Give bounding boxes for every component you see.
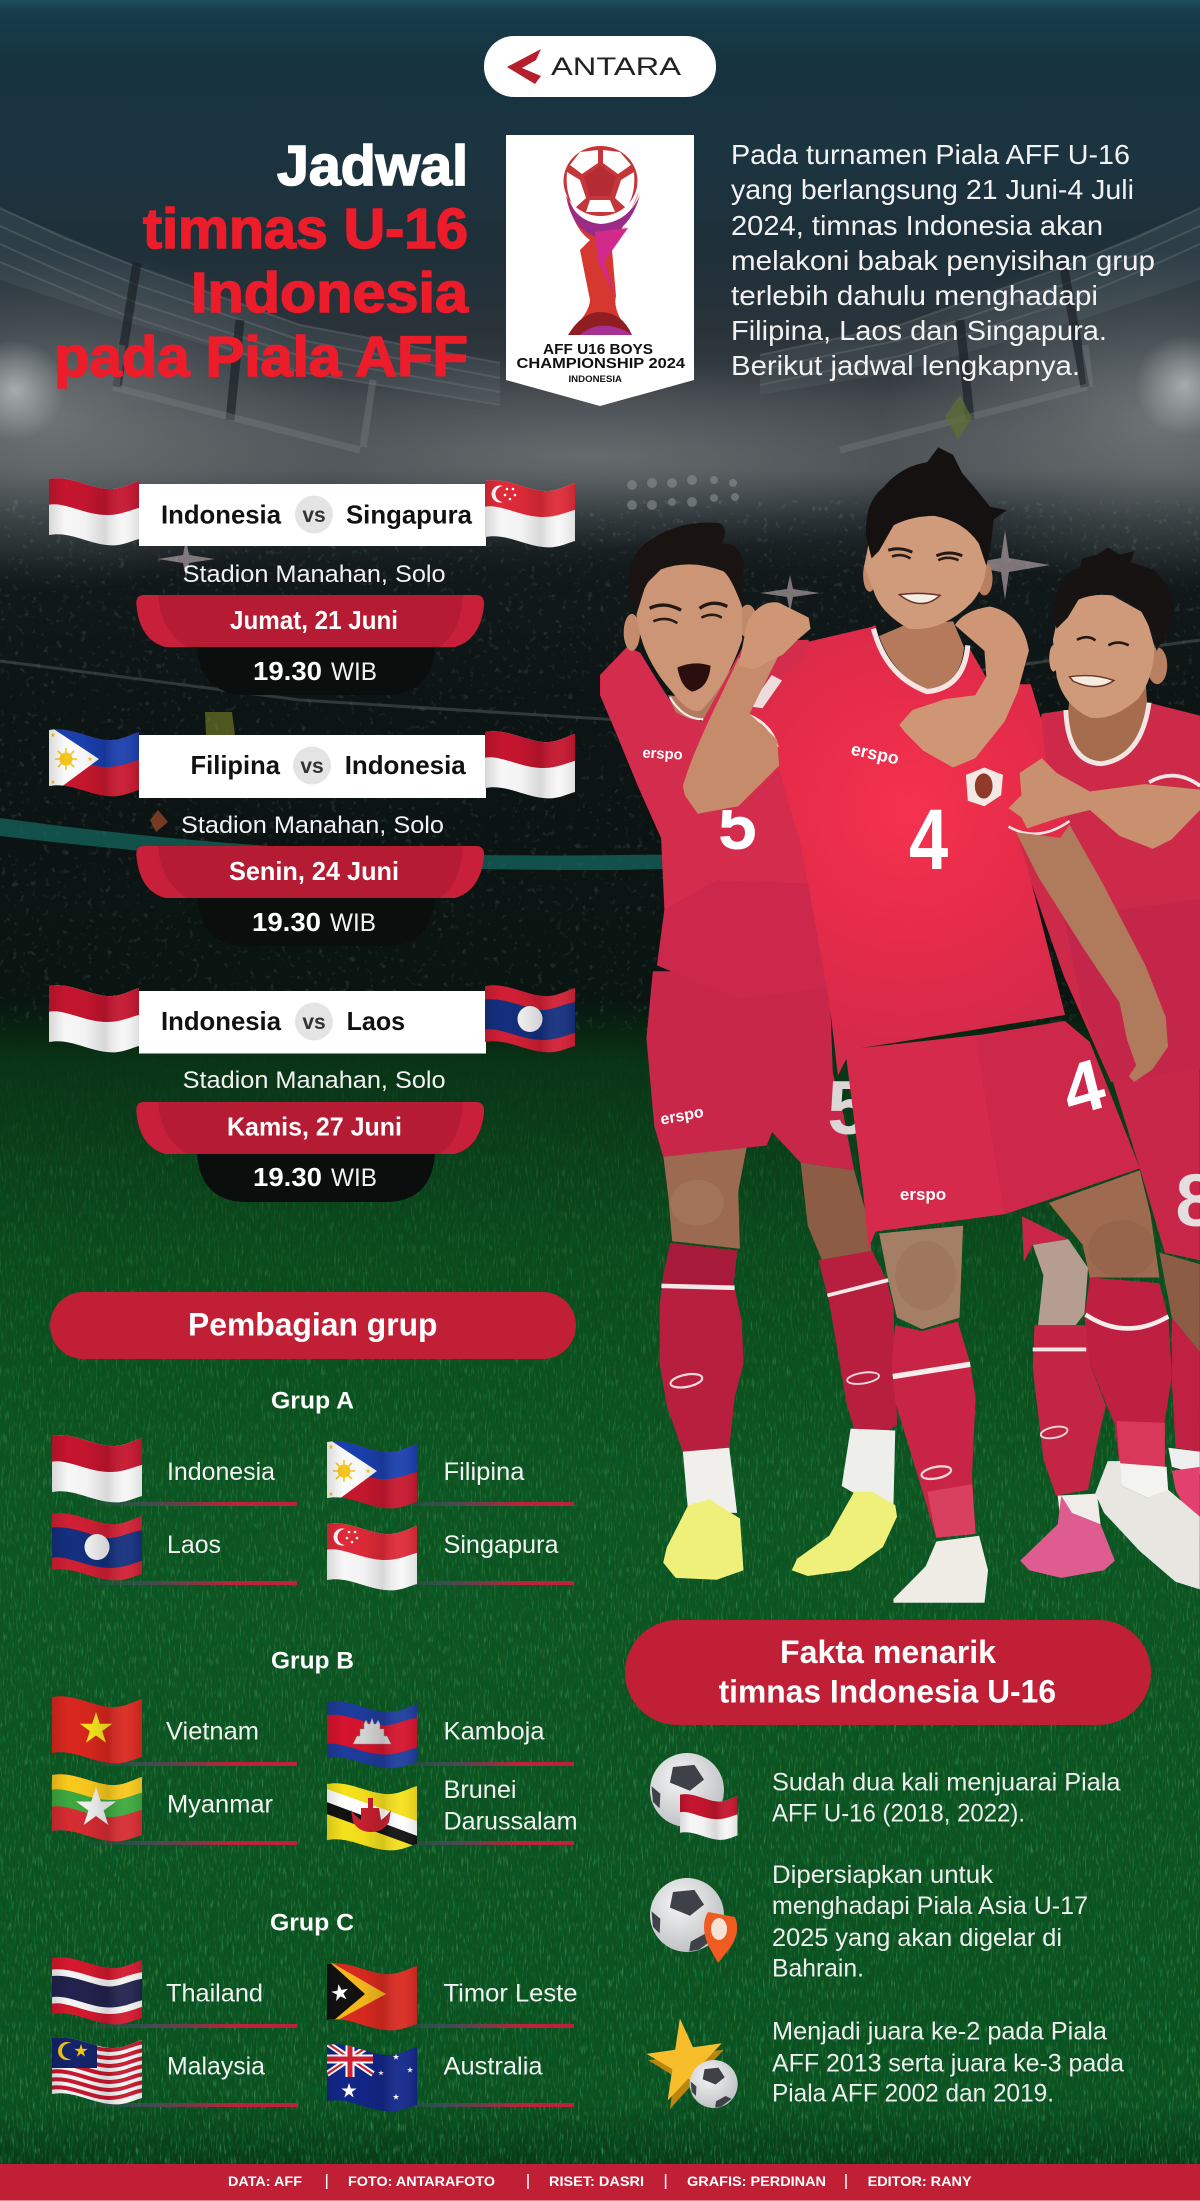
intro paragraph: terlebih dahulu menghadapi: [731, 280, 1098, 311]
intro paragraph: Pada turnamen Piala AFF U-16: [731, 139, 1130, 170]
title: Indonesia: [191, 261, 469, 325]
icon: Singapore flag: [482, 477, 578, 549]
group B: Grup B: [271, 1647, 354, 1674]
heading: Pembagian grup: [50, 1292, 576, 1359]
icon: ball with location pin: [650, 1878, 737, 1963]
match 3: Indonesia vs Laos: Stadion Manahan, Solo: [183, 1067, 446, 1094]
illustration: three Indonesia players celebrating: [600, 447, 1200, 1603]
group C: Timor Leste: [444, 1979, 578, 2007]
player: left, torso and head: [600, 523, 827, 999]
heading: Pembagian grup: Pembagian grup: [188, 1306, 438, 1342]
match 3: Indonesia vs Laos: Kamis, 27 Juni: [227, 1112, 402, 1142]
match 2: Filipina vs Indonesia: 19.30: [252, 907, 321, 937]
group A: Laos: [167, 1531, 221, 1559]
group A: Grup A: [271, 1388, 354, 1415]
icon: trophy with ball: [564, 146, 640, 335]
match 1: Indonesia vs Singapura: Jumat, 21 Juni: [230, 605, 398, 635]
fact 2 text: 2025 yang akan digelar di: [772, 1924, 1062, 1952]
intro paragraph: 2024, timnas Indonesia akan: [731, 210, 1103, 241]
heading: Fakta menarik timnas Indonesia U-16: Fakta menarik: [780, 1634, 996, 1670]
fact 2 text: Dipersiapkan untuk: [772, 1861, 994, 1889]
player: right, legs, boots and shorts: [1020, 1063, 1200, 1578]
footer credits: EDITOR: RANY: [868, 2173, 972, 2189]
player: centre, legs and boots: erspo: [900, 1185, 946, 1204]
match 1: Indonesia vs Singapura: Singapura: [346, 500, 473, 530]
match 2: Filipina vs Indonesia: Filipina: [190, 750, 281, 780]
badge: AFF U16 Boys Championship 2024: [506, 135, 694, 406]
match 2: Filipina vs Indonesia: [46, 726, 578, 946]
group C: [49, 1909, 578, 2113]
intro paragraph: [731, 139, 1155, 381]
group C: Australia: [444, 2053, 543, 2081]
group B: Myanmar: [167, 1791, 273, 1819]
title: timnas U-16: [143, 197, 468, 261]
match 1: Indonesia vs Singapura: Stadion Manahan, Solo: [183, 561, 446, 588]
group A: Indonesia: [167, 1458, 275, 1486]
player: centre, legs and boots: 4: [1055, 1044, 1113, 1132]
match 2: Filipina vs Indonesia: WIB: [330, 909, 376, 937]
icon: Indonesia flag: [46, 475, 142, 547]
group B: Kamboja: [444, 1718, 545, 1746]
title: pada Piala AFF: [54, 325, 468, 389]
badge: AFF U16 Boys Championship 2024: INDONESIA: [568, 374, 622, 385]
footer credits: FOTO: ANTARAFOTO: [348, 2173, 495, 2189]
group B: Brunei: [444, 1776, 516, 1804]
player: left, legs, boots and shorts: [646, 971, 897, 1580]
match 3: Indonesia vs Laos: 19.30: [253, 1162, 322, 1192]
player: right, torso and head: [1012, 547, 1200, 1082]
player: left, legs, boots and shorts: erspo: [659, 1104, 705, 1129]
match 3: Indonesia vs Laos: Laos: [347, 1006, 405, 1036]
match 1: Indonesia vs Singapura: Indonesia: [161, 500, 282, 530]
player: left, torso and head: 5: [718, 785, 757, 864]
heading: Fakta menarik timnas Indonesia U-16: timnas Indonesia U-16: [719, 1674, 1056, 1710]
fact 1 text: Sudah dua kali menjuarai Piala: [772, 1769, 1121, 1797]
intro paragraph: melakoni babak penyisihan grup: [731, 245, 1155, 276]
fact 2 text: Bahrain.: [772, 1954, 864, 1982]
match 2: Filipina vs Indonesia: Senin, 24 Juni: [229, 856, 399, 886]
player: centre, jersey, head and arms: [683, 447, 1200, 1082]
heading: Fakta menarik timnas Indonesia U-16: [625, 1620, 1151, 1725]
player: centre, legs and boots: [845, 1021, 1200, 1603]
title: Jadwal: [277, 134, 468, 198]
match 2: Filipina vs Indonesia: Stadion Manahan, Solo: [181, 812, 444, 839]
player: centre, jersey, head and arms: erspo: [849, 739, 901, 768]
badge: AFF U16 Boys Championship 2024: AFF U16 BOYS: [543, 341, 653, 358]
group C: Thailand: [166, 1979, 263, 2007]
group A: Filipina: [444, 1458, 525, 1486]
group C: Grup C: [270, 1909, 354, 1936]
match 1: Indonesia vs Singapura: WIB: [331, 658, 377, 686]
icon: ball with Indonesia flag: [650, 1753, 740, 1841]
group B: [49, 1647, 578, 1852]
group C: Malaysia: [167, 2053, 265, 2081]
icon: Philippines flag: [46, 726, 142, 798]
fact 3 text: Piala AFF 2002 dan 2019.: [772, 2080, 1054, 2108]
fact 2 text: [772, 1861, 1088, 1982]
group A: [49, 1388, 574, 1592]
player: left, torso and head: erspo: [642, 745, 683, 764]
footer credits: [0, 2164, 1200, 2201]
match 3: Indonesia vs Laos: [46, 982, 578, 1202]
panel: Pembagian grup: [49, 1292, 578, 2113]
fact 2 text: menghadapi Piala Asia U-17: [772, 1892, 1088, 1920]
footer credits: DATA: AFF: [228, 2173, 302, 2189]
match 1: Indonesia vs Singapura: [46, 475, 578, 695]
match 3: Indonesia vs Laos: Indonesia: [161, 1006, 282, 1036]
match 2: Filipina vs Indonesia: Indonesia: [345, 750, 466, 780]
match 3: Indonesia vs Laos: WIB: [331, 1164, 377, 1192]
group B: Vietnam: [166, 1718, 259, 1746]
logo: ANTARA: [484, 36, 716, 97]
match 3: Indonesia vs Laos: vs: [302, 1011, 326, 1034]
match 2: Filipina vs Indonesia: vs: [300, 755, 324, 778]
icon: Laos flag: [482, 982, 578, 1054]
fact 3 text: Menjadi juara ke-2 pada Piala: [772, 2018, 1107, 2046]
group B: Darussalam: [444, 1807, 578, 1835]
intro paragraph: Filipina, Laos dan Singapura.: [731, 315, 1107, 346]
match 1: Indonesia vs Singapura: vs: [302, 504, 326, 527]
badge: AFF U16 Boys Championship 2024: CHAMPIONSHIP 2024: [516, 355, 686, 372]
panel: Fakta menarik: [625, 1620, 1151, 2111]
intro paragraph: Berikut jadwal lengkapnya.: [731, 350, 1080, 381]
group A: Singapura: [444, 1531, 559, 1559]
fact 3 text: [772, 2018, 1124, 2108]
logo: ANTARA: ANTARA: [551, 53, 681, 81]
fact 1 text: AFF U-16 (2018, 2022).: [772, 1799, 1025, 1827]
icon: Indonesia flag: [482, 728, 578, 800]
match 1: Indonesia vs Singapura: 19.30: [253, 656, 322, 686]
jersey number 4: 4: [909, 791, 948, 888]
fact 3 text: AFF 2013 serta juara ke-3 pada: [772, 2050, 1124, 2078]
icon: Indonesia flag: [46, 982, 142, 1054]
player: left, legs, boots and shorts: 5: [827, 1066, 870, 1151]
icon: star with ball: [642, 2013, 738, 2111]
fact 1 text: [772, 1769, 1121, 1827]
title: [54, 134, 469, 389]
intro paragraph: yang berlangsung 21 Juni-4 Juli: [731, 174, 1134, 205]
footer credits: RISET: DASRI: [549, 2173, 644, 2189]
footer credits: GRAFIS: PERDINAN: [687, 2173, 826, 2189]
